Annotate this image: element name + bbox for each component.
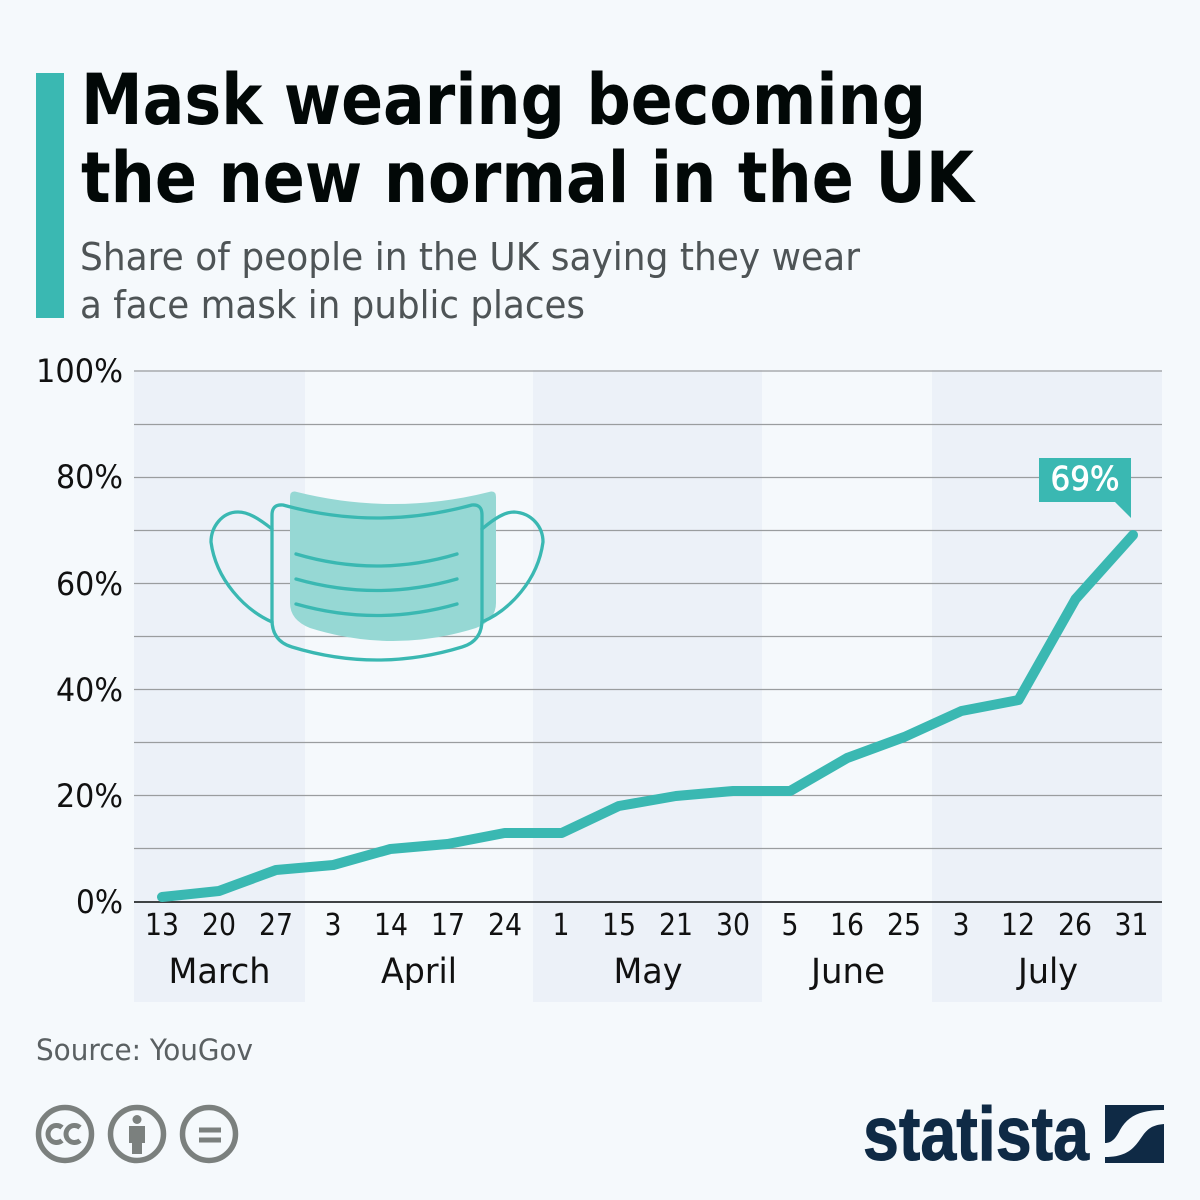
title: Mask wearing becoming (81, 59, 926, 141)
x axis month labels: July (1016, 952, 1078, 992)
x axis day labels: 12 (1001, 908, 1035, 943)
x axis month labels (168, 952, 1078, 992)
x axis day labels: 27 (259, 908, 293, 943)
y axis labels (36, 352, 123, 921)
title (81, 59, 976, 219)
x axis month labels: May (614, 952, 682, 992)
x axis day labels: 26 (1058, 908, 1092, 943)
x axis day labels: 1 (552, 908, 570, 943)
callout: 69%: 69% (1050, 459, 1120, 498)
statista wordmark: statista (863, 1092, 1090, 1177)
month bands (134, 370, 1162, 1002)
source: Source: YouGov (36, 1033, 253, 1067)
icon: attribution (110, 1108, 164, 1160)
x axis day labels: 20 (202, 908, 236, 943)
x axis day labels: 17 (431, 908, 465, 943)
title: the new normal in the UK (81, 137, 976, 219)
y axis labels: 20% (56, 777, 123, 815)
line chart: mask wearing share (162, 535, 1133, 897)
x axis day labels: 24 (488, 908, 522, 943)
icon: statista logo (1105, 1105, 1164, 1163)
x axis month labels: April (381, 952, 457, 992)
icon: no derivatives (182, 1108, 236, 1160)
x axis day labels: 3 (952, 908, 970, 943)
x axis day labels: 25 (887, 908, 921, 943)
y axis labels: 60% (56, 565, 123, 603)
y axis labels: 80% (56, 458, 123, 496)
x axis month labels: March (168, 952, 270, 992)
y axis labels: 100% (36, 352, 123, 390)
x axis day labels (145, 908, 1148, 943)
x axis day labels: 5 (782, 908, 798, 943)
subtitle (80, 235, 860, 328)
x axis day labels: 15 (602, 908, 636, 943)
y axis labels: 0% (76, 883, 123, 921)
x axis day labels: 21 (659, 908, 693, 943)
x axis day labels: 30 (716, 908, 750, 943)
x axis day labels: 14 (374, 908, 408, 943)
subtitle: a face mask in public places (80, 283, 585, 328)
x axis day labels: 13 (145, 908, 179, 943)
y axis labels: 40% (56, 671, 123, 709)
x axis month labels: June (809, 952, 885, 992)
accent bar (36, 73, 64, 318)
x axis day labels: 16 (830, 908, 864, 943)
icon: cc license (38, 1108, 92, 1160)
callout: 69% (1039, 458, 1131, 518)
x axis day labels: 3 (324, 908, 342, 943)
icon: face mask (211, 492, 543, 660)
subtitle: Share of people in the UK saying they wear (80, 235, 860, 280)
x axis day labels: 31 (1114, 908, 1148, 943)
